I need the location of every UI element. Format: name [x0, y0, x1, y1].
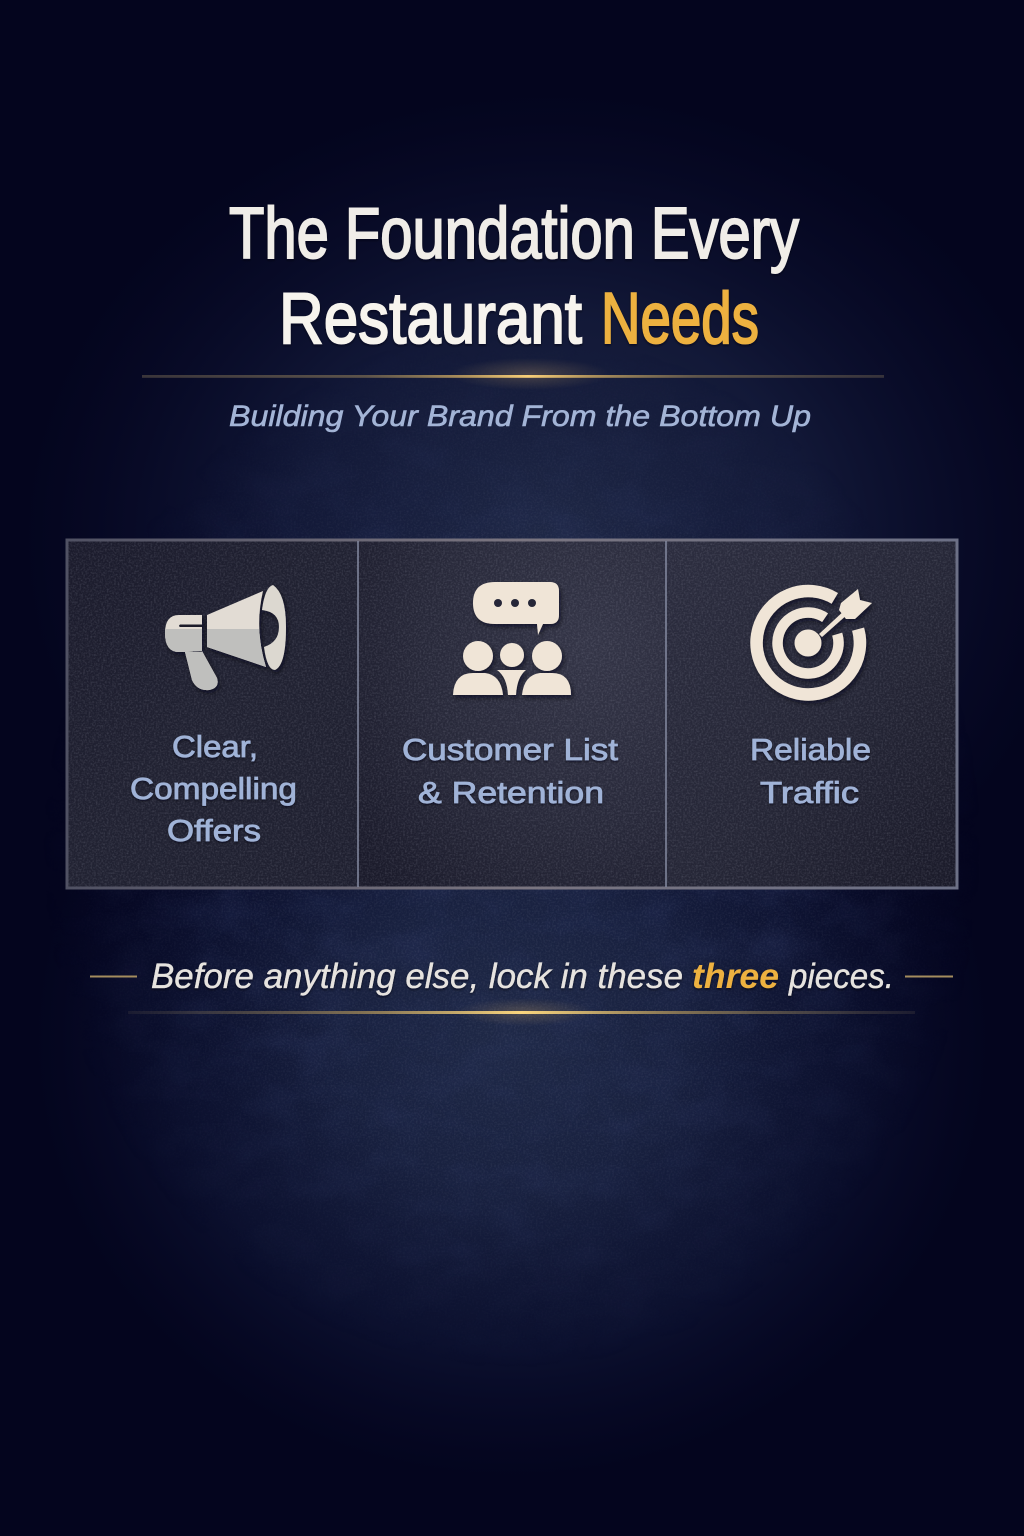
label: offers: Clear,	[172, 729, 258, 764]
panel: offers background	[67, 540, 358, 888]
label: traffic: Reliable	[750, 732, 871, 767]
title	[229, 194, 799, 359]
label: offers: Offers	[167, 813, 261, 848]
three pillar panel	[67, 540, 957, 888]
closing statement: Before anything else, lock in these	[151, 957, 683, 996]
label: traffic: Traffic	[760, 775, 859, 810]
label: customer list: & Retention	[418, 775, 604, 810]
title divider	[142, 358, 884, 390]
icon: megaphone	[165, 585, 286, 690]
background	[94, 183, 971, 1404]
label: traffic	[750, 732, 871, 810]
title accent word: Needs	[601, 279, 759, 359]
subtitle: Building Your Brand From the Bottom Up	[229, 400, 811, 433]
closing divider	[128, 998, 915, 1026]
title line 1: The Foundation Every	[229, 194, 799, 274]
label: customer list: Customer List	[402, 732, 618, 767]
label: offers	[130, 729, 297, 848]
title line 2: Restaurant	[279, 279, 582, 359]
icon: customers with speech bubble	[453, 582, 571, 695]
highlighted word: three	[692, 957, 779, 996]
panel: traffic background	[666, 540, 957, 888]
closing statement: pieces.	[788, 957, 894, 996]
label: offers: Compelling	[130, 771, 297, 806]
panel: customer list background	[358, 540, 666, 888]
label: customer list	[402, 732, 618, 810]
icon: target with arrow	[757, 589, 872, 694]
infographic canvas	[66, 183, 971, 1404]
closing accent dashes	[90, 976, 953, 978]
